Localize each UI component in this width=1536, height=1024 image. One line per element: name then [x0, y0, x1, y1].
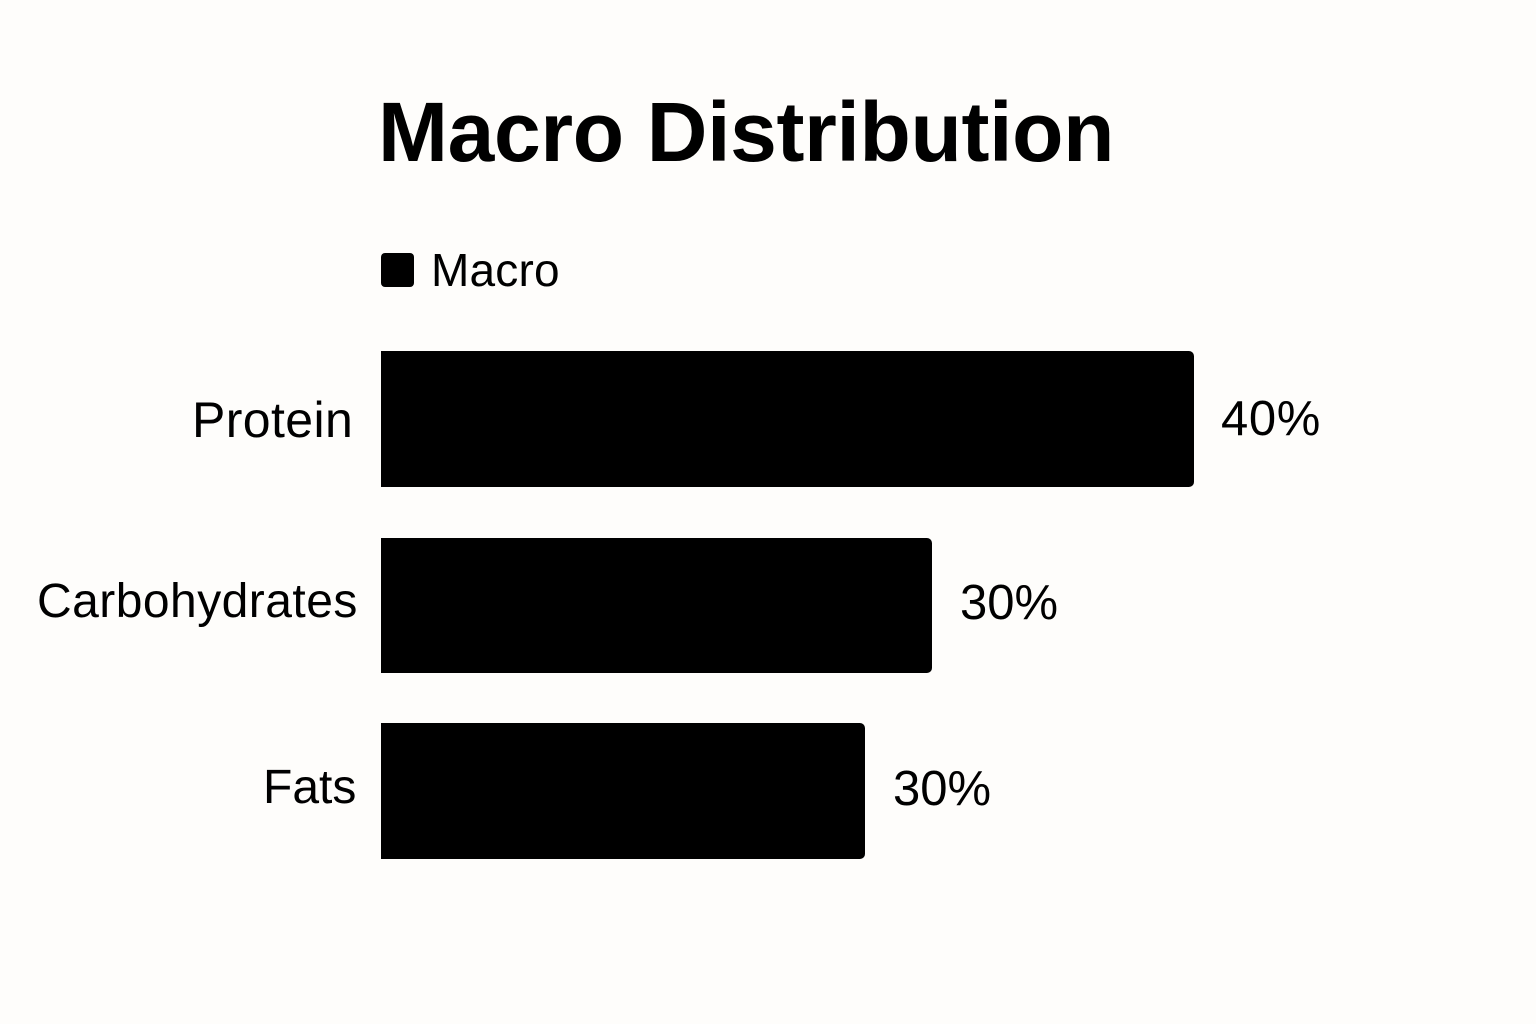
legend label: Macro: [431, 244, 560, 296]
category label: Carbohydrates: Carbohydrates: [37, 575, 358, 628]
value: Carbohydrates 30%: 30%: [960, 576, 1058, 630]
bar: Fats: [381, 723, 865, 859]
title: Macro Distribution: [378, 85, 1114, 179]
bar: Carbohydrates: [381, 538, 932, 673]
legend swatch: [381, 253, 414, 287]
value: Protein 40%: 40%: [1221, 392, 1321, 446]
category label: Protein: Protein: [192, 392, 353, 448]
bar: Protein: [381, 351, 1194, 487]
legend: [381, 244, 560, 296]
category label: Fats: Fats: [263, 761, 356, 814]
value: Fats 30%: 30%: [893, 762, 991, 816]
